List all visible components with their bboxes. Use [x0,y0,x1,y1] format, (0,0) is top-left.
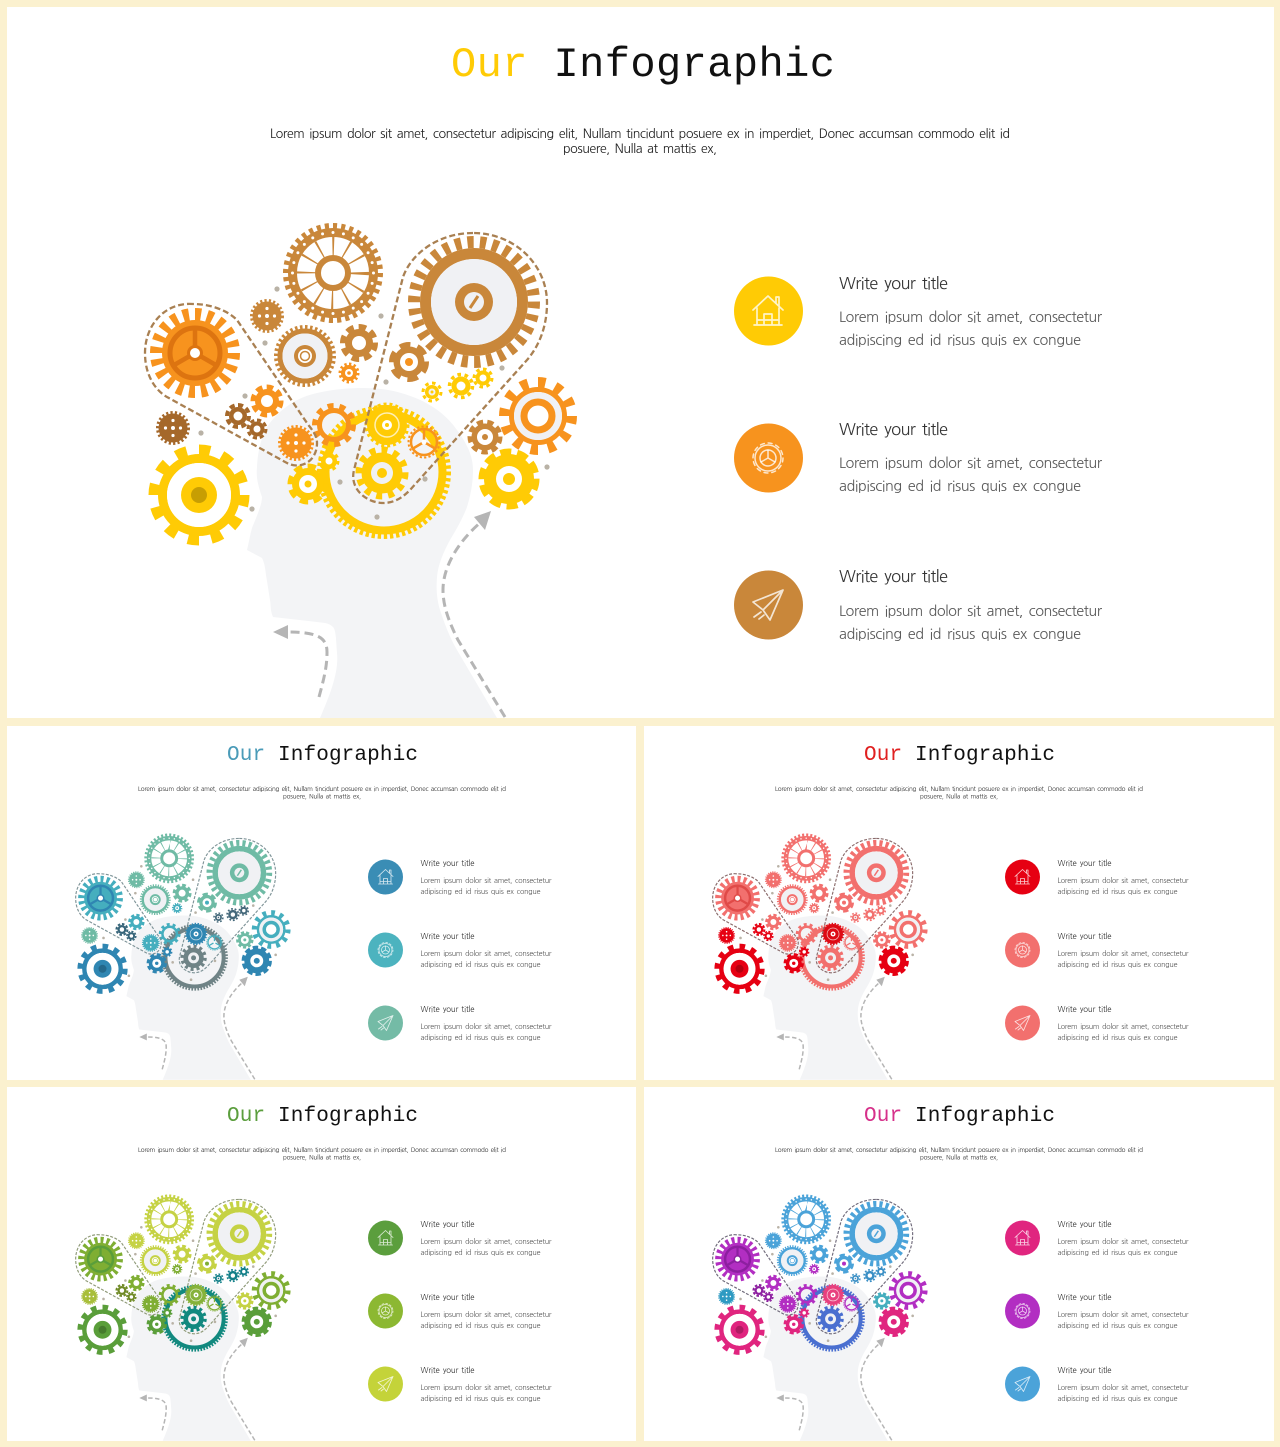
item 1: house [734,276,1103,348]
item 3: paper plane: Write your title [839,569,948,585]
red item list: adipiscing ed id risus quis ex congue [1058,961,1178,969]
green item list: Write your title [420,1294,474,1302]
green item list: Write your title [420,1221,474,1229]
large spoked gear [286,226,380,320]
item 2: gear: adipiscing ed id risus quis ex congue [839,479,1081,494]
panel: main yellow infographic [7,7,1274,718]
big accent gear left [154,450,244,540]
panel: pink and blue variant: Lorem ipsum dolor sit amet, consectetur adipiscing elit, Nullam tincidunt posuere ex in imperdiet, Donec accumsan commodo elit id [775,1146,1143,1153]
orange perforated gear [280,426,312,460]
subtitle text block [270,127,1010,155]
item 1: house: Write your title [839,276,948,292]
dark small gear [227,405,249,427]
panel: green variant [7,1087,636,1441]
illustration: red gears [713,835,925,1080]
large ring gear inside head [320,408,448,536]
small gear behind ring [320,452,338,470]
panel: pink and blue variant: Our Infographic [864,1105,1055,1128]
arrow: dashed up to the right [443,511,505,717]
pink item list: Lorem ipsum dolor sit amet, consectetur [1058,1238,1189,1246]
red item list: Write your title [1058,1006,1112,1014]
green item list: Lorem ipsum dolor sit amet, consectetur [420,1238,552,1246]
blue item list [368,860,552,1042]
green item list: adipiscing ed id risus quis ex congue [420,1395,541,1403]
panel: blue variant: Lorem ipsum dolor sit amet, consectetur adipiscing elit, Nullam tincidunt posuere ex in imperdiet, Donec accumsan commodo elit id [138,785,506,792]
small gear trio [423,369,492,401]
perforated gear [252,300,282,332]
tiny orange gear [340,364,358,382]
head with gears illustration [145,226,572,718]
item 2: gear [734,422,1103,494]
item 2: gear: Lorem ipsum dolor sit amet, consectetur [839,456,1103,471]
blue item list: adipiscing ed id risus quis ex congue [420,888,541,896]
illustration: blue gears [76,835,288,1080]
big accent gear right [482,452,536,506]
panel: blue variant: posuere, Nulla at mattis ex, [283,792,361,800]
blue item list: Write your title [420,1006,474,1014]
green item list: Lorem ipsum dolor sit amet, consectetur [420,1311,552,1319]
item 3: paper plane: Lorem ipsum dolor sit amet, consectetur [839,604,1103,619]
small tan gear [343,327,375,359]
item 2: gear: Write your title [839,422,948,438]
item 3: paper plane [734,569,1103,642]
medium fine-tooth gear [276,327,334,385]
thin spoke gear [408,426,440,458]
pink item list: adipiscing ed id risus quis ex congue [1058,1249,1178,1257]
arrow: dashed to the left [273,625,327,697]
pink item list [1005,1220,1189,1403]
dark tiny gear [248,420,266,438]
green item list: Write your title [420,1367,474,1375]
hex gear [392,345,426,379]
panel: green variant: posuere, Nulla at mattis ex, [283,1154,361,1160]
dark perforated gear [158,412,188,444]
top centre gear [366,404,408,446]
trio gear two [450,374,472,398]
pink item list: adipiscing ed id risus quis ex congue [1058,1395,1178,1403]
red item list [1005,860,1189,1042]
pink item list: Write your title [1058,1294,1112,1302]
dashed loop left [145,304,317,466]
blue item list: Write your title [420,933,474,941]
pink item list: Write your title [1058,1221,1112,1229]
green item list [368,1220,552,1403]
gear on ring left [290,466,326,502]
small tan gear right [470,422,500,452]
blue item list: Lorem ipsum dolor sit amet, consectetur [420,950,552,958]
panel: red variant: posuere, Nulla at mattis ex, [920,792,998,800]
orange spoked gear in left loop [156,314,234,392]
illustration: pink and blue gears [713,1196,925,1441]
subtitle text block: posuere, Nulla at mattis ex, [563,142,717,155]
panel: pink and blue variant: posuere, Nulla at mattis ex, [920,1154,998,1160]
red item list: adipiscing ed id risus quis ex congue [1058,888,1178,896]
orange small gear [253,387,281,415]
red item list: Lorem ipsum dolor sit amet, consectetur [1058,1023,1189,1031]
red item list: Write your title [1058,860,1112,868]
blue item list: Lorem ipsum dolor sit amet, consectetur [420,1023,552,1031]
largest gear top right [414,242,534,362]
panel: red variant: Lorem ipsum dolor sit amet, consectetur adipiscing elit, Nullam tincidunt posuere ex in imperdiet, Donec accumsan commodo elit id [775,785,1143,792]
pink item list: Lorem ipsum dolor sit amet, consectetur [1058,1384,1189,1392]
title: Our Infographic [451,41,835,89]
red item list: adipiscing ed id risus quis ex congue [1058,1034,1178,1042]
subtitle text block: Lorem ipsum dolor sit amet, consectetur adipiscing elit, Nullam tincidunt posuere ex in imperdiet, Donec accumsan commodo elit id [270,127,1010,140]
item 1: house: adipiscing ed id risus quis ex congue [839,333,1081,348]
inner gear [359,450,405,496]
illustration: green gears [76,1196,288,1441]
blue item list: Lorem ipsum dolor sit amet, consectetur [420,877,552,885]
panel: blue variant [7,726,636,1080]
head silhouette [247,388,497,718]
big orange gear right [504,382,572,450]
blue item list: adipiscing ed id risus quis ex congue [420,1034,541,1042]
pink item list: Lorem ipsum dolor sit amet, consectetur [1058,1311,1189,1319]
green item list: Lorem ipsum dolor sit amet, consectetur [420,1384,552,1392]
blue item list: Write your title [420,860,474,868]
panel: green variant: Lorem ipsum dolor sit amet, consectetur adipiscing elit, Nullam tincidunt posuere ex in imperdiet, Donec accumsan commodo elit id [138,1146,506,1153]
item 3: paper plane: adipiscing ed id risus quis ex congue [839,627,1081,642]
dashed loop right [353,233,547,503]
red item list: Lorem ipsum dolor sit amet, consectetur [1058,877,1189,885]
blue item list: adipiscing ed id risus quis ex congue [420,961,541,969]
green item list: adipiscing ed id risus quis ex congue [420,1322,541,1330]
panel: blue variant: Our Infographic [227,744,418,767]
panel: green variant: Our Infographic [227,1105,418,1128]
overlapping orange gear [315,406,353,444]
panel: pink and blue variant [644,1087,1274,1441]
trio gear one [423,383,441,401]
panel: red variant [644,726,1274,1080]
green item list: adipiscing ed id risus quis ex congue [420,1249,541,1257]
panel: red variant: Our Infographic [864,744,1055,767]
small grey connector dots [198,286,550,520]
item 1: house: Lorem ipsum dolor sit amet, consectetur [839,310,1103,325]
red item list: Write your title [1058,933,1112,941]
pink item list: adipiscing ed id risus quis ex congue [1058,1322,1178,1330]
trio gear three [474,369,492,387]
pink item list: Write your title [1058,1367,1112,1375]
red item list: Lorem ipsum dolor sit amet, consectetur [1058,950,1189,958]
